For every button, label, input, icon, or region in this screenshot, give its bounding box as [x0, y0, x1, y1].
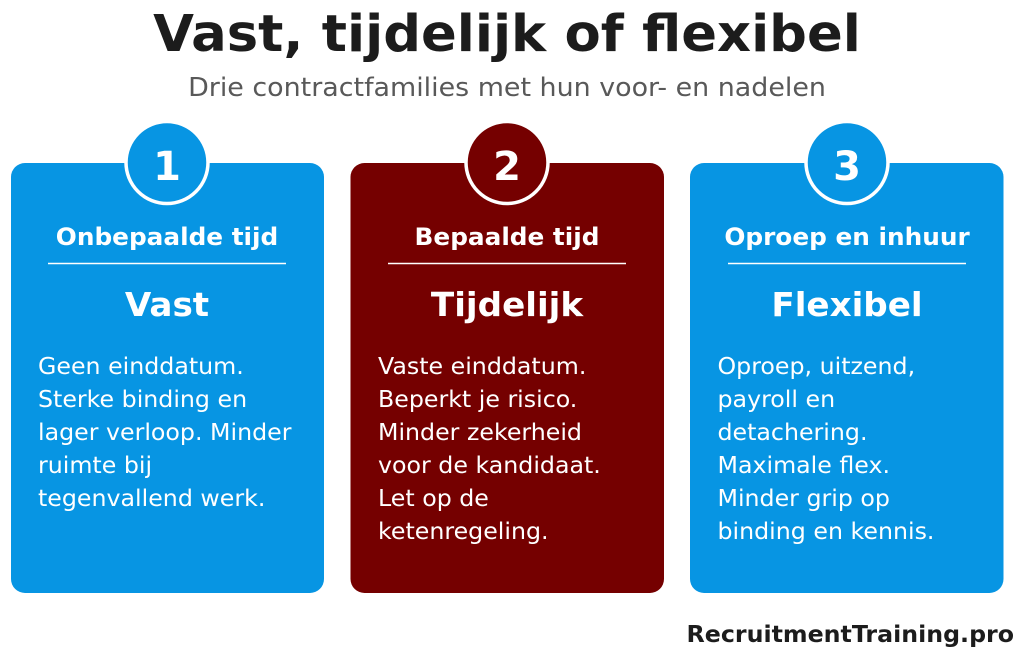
- panel 1 body: ruimte bij: [38, 451, 152, 479]
- panel 2 heading: Bepaalde tijd: [415, 222, 599, 251]
- panel: flexibel: [690, 122, 1004, 593]
- panel 3 body: detachering.: [718, 418, 867, 446]
- panel 1 heading: Onbepaalde tijd: [56, 222, 278, 251]
- badge 1: [126, 122, 208, 204]
- panel 1 body: Geen einddatum.: [38, 352, 244, 380]
- panel 2 body: voor de kandidaat.: [378, 451, 601, 479]
- panel 2 body: Let op de: [378, 484, 489, 512]
- subtitle: Drie contractfamilies met hun voor- en nadelen: [188, 72, 826, 103]
- panel 2 body: Beperkt je risico.: [378, 385, 577, 413]
- panel 2 body: Minder zekerheid: [378, 418, 582, 446]
- panel 2 title: Tijdelijk: [431, 286, 584, 324]
- panel: tijdelijk: [350, 122, 664, 593]
- panel: vast: [11, 122, 324, 593]
- panel 2 body: ketenregeling.: [378, 517, 549, 545]
- badge 1: 1: [153, 144, 181, 190]
- panel 1 body: lager verloop. Minder: [38, 418, 292, 446]
- badge 2: [466, 122, 548, 204]
- brand footer: RecruitmentTraining.pro: [687, 620, 1014, 648]
- panel 3 title: Flexibel: [771, 286, 923, 324]
- panel 1 body: tegenvallend werk.: [38, 484, 265, 512]
- panel 3 body: binding en kennis.: [718, 517, 934, 545]
- panel 3 body: payroll en: [718, 385, 835, 413]
- badge 3: 3: [833, 144, 861, 190]
- panel 3 body: Maximale flex.: [718, 451, 890, 479]
- title: Vast, tijdelijk of flexibel: [153, 5, 861, 64]
- panel 3 body: Oproep, uitzend,: [718, 352, 915, 380]
- panel 3 heading: Oproep en inhuur: [724, 222, 970, 251]
- badge 3: [806, 122, 888, 204]
- panel 1 body: Sterke binding en: [38, 385, 247, 413]
- panel 1 title: Vast: [125, 286, 209, 324]
- panel 2 body: Vaste einddatum.: [378, 352, 586, 380]
- badge 2: 2: [493, 144, 521, 190]
- panel 3 body: Minder grip op: [718, 484, 890, 512]
